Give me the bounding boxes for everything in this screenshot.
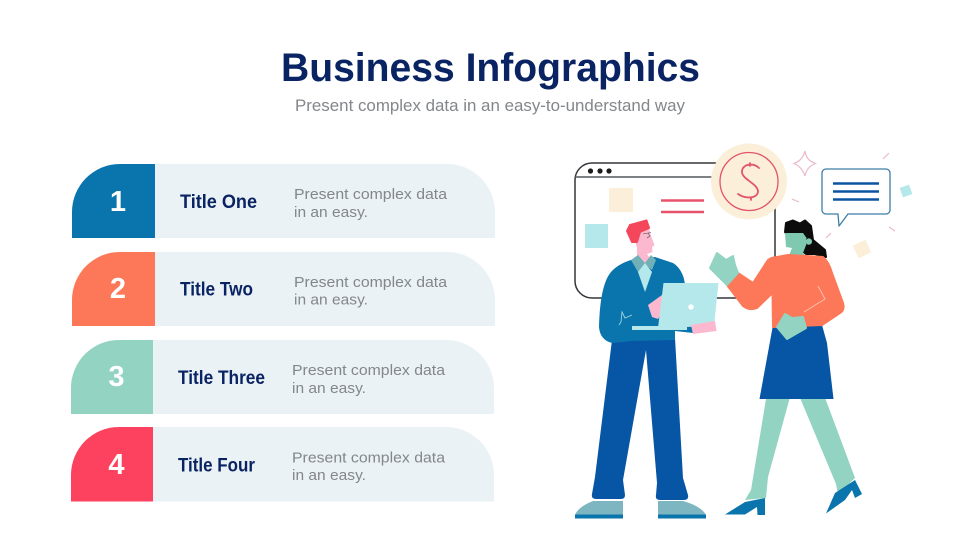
skirt: [760, 325, 834, 399]
panel: row 3: [71, 340, 494, 414]
illustration: business discussion: [575, 144, 912, 518]
tie: [638, 263, 652, 292]
shoes: [725, 498, 765, 515]
hair: [785, 220, 826, 257]
glasses: [643, 232, 651, 238]
face and neck: [785, 233, 808, 258]
laptop: [632, 283, 718, 330]
subtitle: Present complex data in an easy-to-understand way: [295, 97, 686, 115]
trousers: [592, 338, 688, 500]
panel: row 3: 3: [108, 361, 125, 393]
icon: dollar coin: [711, 144, 787, 220]
panel: row 3: Title Three: [178, 368, 265, 389]
title: Business Infographics: [281, 46, 700, 90]
panel: row 1: Present complex data: [294, 186, 448, 203]
panel: row 4: in an easy.: [292, 467, 366, 484]
panel: row 2: Title Two: [180, 280, 253, 300]
panel: row 2: Present complex data: [294, 274, 448, 291]
sweater: [727, 255, 844, 327]
panel: row 3: Present complex data: [292, 362, 446, 379]
legs: [745, 399, 790, 500]
panel: row 4: [71, 427, 494, 502]
panel: row 2: 2: [110, 273, 126, 305]
icon: confetti: [792, 153, 912, 258]
man: [575, 220, 718, 518]
icon: speech bubble: [822, 169, 890, 226]
panel: row 2: [72, 252, 495, 326]
panel: row 1: Title One: [180, 192, 257, 213]
torso: [599, 257, 693, 343]
shoes: [575, 501, 706, 518]
panel: row 1: in an easy.: [294, 204, 368, 221]
panel: row 4: 4: [108, 449, 125, 481]
panel: row 3: in an easy.: [292, 380, 366, 397]
raised hand: [710, 253, 738, 285]
panel: row 1: [72, 164, 495, 238]
pink hand on laptop: [648, 295, 664, 319]
panel: row 4: Present complex data: [292, 450, 446, 466]
icon: browser window: [575, 163, 775, 298]
collar: [631, 255, 656, 272]
woman: [710, 220, 862, 515]
icon: sparkle star: [794, 151, 816, 176]
hair: [627, 220, 649, 242]
panel: row 1: 1: [110, 186, 126, 218]
panel: row 2: in an easy.: [294, 292, 368, 308]
panel: row 4: Title Four: [178, 456, 256, 476]
neck and face: [635, 228, 654, 265]
belly hand: [777, 314, 806, 339]
pink hand on base: [691, 321, 716, 334]
